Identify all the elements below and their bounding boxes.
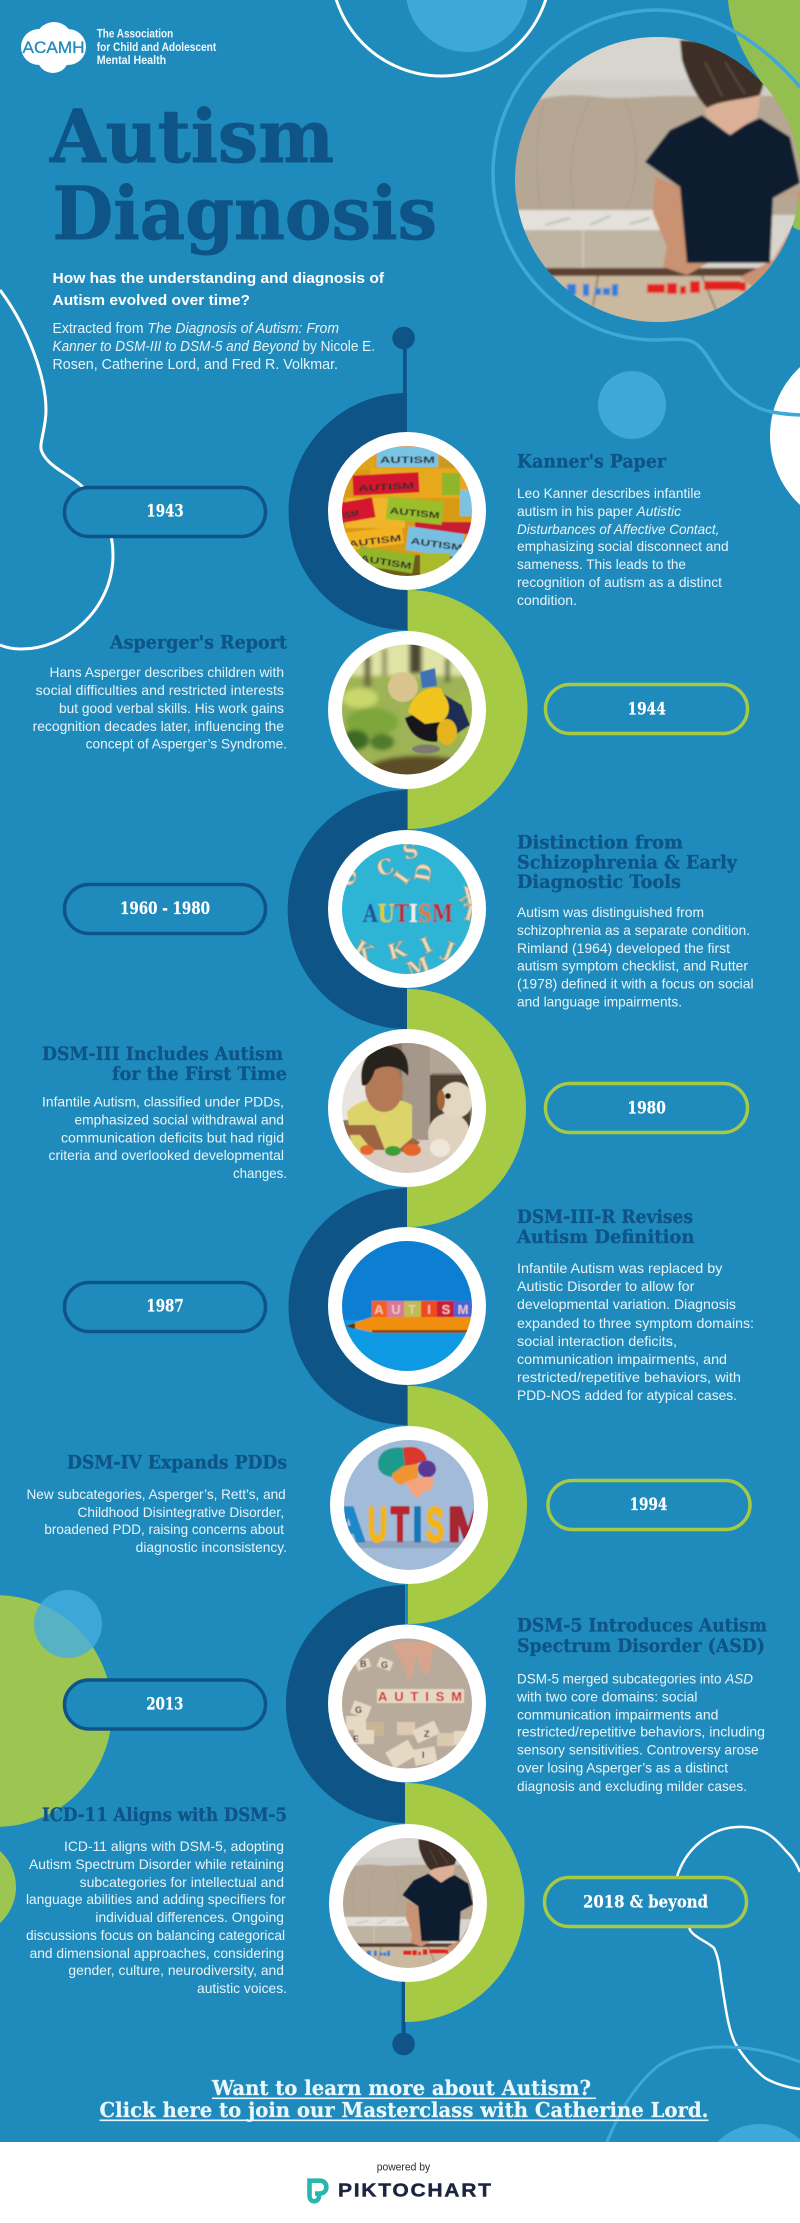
photo: scrabble tiles spelling AUTISM: G <box>355 1705 362 1715</box>
text block: Kanner's Paper: recognition of autism as a distinct <box>517 575 722 590</box>
photo: colourful AUTISM letters on blue: C <box>373 852 397 882</box>
photo: AUTISM blocks on a pencil: I <box>427 1302 431 1317</box>
date pill: 1944: 1944 <box>628 700 666 720</box>
text block: DSM-III Includes Autism: Infantile Autism, classified under PDDs, <box>42 1095 284 1110</box>
decorative shape: left green circle <box>0 1595 112 1827</box>
text block: DSM-IV Expands PDDs: New subcategories, Asperger’s, Rett’s, and <box>26 1487 286 1502</box>
photo: colourful AUTISM letters on blue: K <box>385 936 410 965</box>
text block: DSM-5 Introduces ASD: over losing Asperger’s as a distinct <box>517 1761 728 1776</box>
text block: Kanner's Paper: autism in his paper Autistic <box>517 504 681 519</box>
decorative shape: top light blue circle <box>406 0 528 52</box>
text block: DSM-IV Expands PDDs: broadened PDD, raising concerns about <box>44 1522 284 1537</box>
text block: DSM-5 Introduces ASD: DSM-5 Introduces Autism <box>517 1616 767 1637</box>
photo: scrabble tiles spelling AUTISM: Z <box>424 1729 430 1739</box>
text block: DSM-III-R Revises Autism Definition: PDD-NOS added for atypical cases. <box>517 1388 737 1403</box>
photo: autism paper labels: AUTISM <box>348 533 402 549</box>
title: Diagnosis <box>52 171 437 257</box>
date pill: 1980 <box>546 1084 748 1132</box>
source citation: Kanner to DSM-III to DSM-5 and Beyond by Nicole E. <box>52 339 375 355</box>
text block: DSM-III-R Revises Autism Definition: social interaction deficits, <box>517 1334 677 1349</box>
photo: scrabble tiles spelling AUTISM: G <box>381 1660 388 1670</box>
text block: DSM-5 Introduces ASD <box>516 1616 767 1794</box>
date pill: 1994 <box>548 1480 750 1530</box>
date pill: 1943 <box>64 488 266 536</box>
text block: Distinction from Schizophrenia: and language impairments. <box>517 994 682 1009</box>
text block: ICD-11 Aligns with DSM-5: ICD-11 aligns with DSM-5, adopting <box>64 1839 284 1854</box>
photo: clay brain and AUTISM letters: U <box>368 1499 387 1552</box>
decorative shape: small light blue circle <box>598 371 666 439</box>
photo: colourful AUTISM letters on blue: O <box>333 864 363 890</box>
Piktochart wordmark: PIKTOCHART <box>338 2180 493 2201</box>
text block: Asperger's Report: but good verbal skills. His work gains <box>59 701 284 716</box>
photo: AUTISM blocks on a pencil: U <box>391 1302 401 1317</box>
photo: scrabble tiles spelling AUTISM: AUTISM <box>378 1689 462 1704</box>
text block: DSM-III-R Revises Autism Definition: communication impairments, and <box>517 1352 727 1367</box>
decorative shape: translucent light blue circle <box>34 1590 102 1658</box>
date pill: 2018 and beyond: 2018 & beyond <box>583 1893 708 1913</box>
text block: DSM-III-R Revises Autism Definition: expanded to three symptom domains: <box>517 1316 754 1331</box>
text block: Asperger's Report: social difficulties and restricted interests <box>36 683 284 698</box>
date pill: 1960 - 1980: 1960 - 1980 <box>120 899 210 919</box>
text block: Distinction from Schizophrenia: autism symptom checklist, and Rutter <box>517 958 748 973</box>
photo: autism paper labels: AUTISM <box>359 553 412 571</box>
photo: colourful AUTISM letters on blue: K <box>350 935 378 966</box>
photo: clay brain and AUTISM letters: T <box>391 1499 409 1552</box>
logo: ACAMH <box>21 22 216 73</box>
decorative shape: right white blob <box>770 342 800 530</box>
timeline spine <box>392 327 415 2055</box>
photo: clay brain and AUTISM letters: M <box>448 1499 488 1552</box>
photo: scrabble tiles spelling AUTISM: E <box>353 1734 359 1744</box>
date pill: 1943: 1943 <box>146 502 184 522</box>
logo wordmark: ACAMH <box>22 38 84 57</box>
text block: ICD-11 Aligns with DSM-5: and dimensional approaches, considering <box>30 1946 284 1961</box>
text block: ICD-11 Aligns with DSM-5: discussions focus on balancing categorical <box>26 1928 285 1943</box>
decorative line: bottom right white outline <box>676 1827 800 2089</box>
date pill: 1960 - 1980 <box>64 884 266 934</box>
text block: DSM-III Includes Autism: for the First Time <box>112 1064 287 1085</box>
photo: AUTISM blocks on a pencil <box>340 1240 475 1375</box>
photo: autism paper labels: AUTISM <box>389 505 440 521</box>
text block: DSM-III-R Revises Autism Definition: Infantile Autism was replaced by <box>517 1261 723 1276</box>
date pill: 1980: 1980 <box>628 1098 666 1118</box>
text block: ICD-11 Aligns with DSM-5: gender, culture, neurodiversity, and <box>68 1963 284 1978</box>
text block: DSM-IV Expands PDDs: diagnostic inconsistency. <box>136 1540 287 1555</box>
photo: clay brain and AUTISM letters: I <box>413 1499 422 1552</box>
decorative line: bottom right light blue arc <box>607 2047 800 2142</box>
text block: DSM-IV Expands PDDs: DSM-IV Expands PDDs <box>67 1453 287 1474</box>
photo: colourful AUTISM letters on blue: S <box>400 837 421 865</box>
text block: ICD-11 Aligns with DSM-5: autistic voices. <box>197 1981 287 1996</box>
title <box>49 94 437 257</box>
photo: colourful AUTISM letters on blue: X <box>456 881 481 911</box>
white photo rings <box>328 432 488 1982</box>
photo: colourful AUTISM letters on blue <box>342 844 472 974</box>
title: Autism <box>49 94 334 180</box>
call to action <box>100 2076 708 2122</box>
subtitle question: How has the understanding and diagnosis of <box>52 271 384 287</box>
photo: autism paper labels <box>339 445 475 580</box>
text block: DSM-III-R Revises Autism Definition: restricted/repetitive behaviors, with <box>517 1370 741 1385</box>
photo: AUTISM blocks on a pencil: T <box>408 1302 416 1317</box>
decorative line: light blue ring around the photo <box>493 10 800 415</box>
text block: DSM-III-R Revises Autism Definition: Autism Definition <box>516 1227 695 1248</box>
text block: DSM-III Includes Autism: communication deficits but had rigid <box>61 1131 284 1146</box>
date pill: 2013 <box>64 1680 266 1729</box>
subtitle question <box>52 271 384 309</box>
powered by: powered by <box>377 2162 431 2174</box>
photo: boy lining up blocks (small) <box>341 1835 478 1972</box>
text block: DSM-III-R Revises Autism Definition: DSM-III-R Revises <box>517 1207 693 1228</box>
date pill: 1987 <box>64 1282 266 1332</box>
timeline arcs <box>286 393 527 2022</box>
photo: colourful AUTISM letters on blue: M <box>403 951 434 983</box>
source citation <box>52 321 375 373</box>
text block: DSM-III Includes Autism: emphasized social withdrawal and <box>74 1113 284 1128</box>
text block: Distinction from Schizophrenia <box>517 833 754 1009</box>
text block: Distinction from Schizophrenia: Rimland (1964) developed the first <box>517 941 730 956</box>
text block: Kanner's Paper: emphasizing social disconnect and <box>517 539 729 554</box>
text block: Kanner's Paper: Kanner's Paper <box>517 452 666 472</box>
icon: ACAMH cloud <box>21 22 86 73</box>
text block: Kanner's Paper: sameness. This leads to the <box>517 557 686 572</box>
organisation name <box>97 27 216 67</box>
photo: clay brain and AUTISM letters <box>344 1440 474 1570</box>
photo: scrabble tiles spelling AUTISM: B <box>360 1659 367 1669</box>
text block: DSM-IV Expands PDDs <box>26 1453 287 1555</box>
photo: child playing with teddy bear <box>342 1043 472 1173</box>
text block: DSM-5 Introduces ASD: restricted/repetitive behaviors, including <box>517 1724 765 1740</box>
text block: DSM-5 Introduces ASD: communication impairments and <box>517 1708 718 1723</box>
photo: autism paper labels: AUTISM <box>410 536 463 553</box>
text block: DSM-5 Introduces ASD: with two core domains: social <box>516 1690 697 1704</box>
decorative shape: top white ring <box>331 0 551 76</box>
date pill: 1987: 1987 <box>146 1297 184 1317</box>
decorative shape: top green blob <box>728 0 800 230</box>
text block: Distinction from Schizophrenia: schizophrenia as a separate condition. <box>517 923 750 938</box>
decorative shape: small left green circle <box>0 1838 16 1936</box>
decorative line: left white outline <box>0 290 113 649</box>
text block: DSM-III-R Revises Autism Definition <box>516 1207 754 1403</box>
text block: DSM-IV Expands PDDs: Childhood Disintegrative Disorder, <box>78 1505 284 1520</box>
photo: AUTISM blocks on a pencil: A <box>374 1302 384 1317</box>
text block: DSM-III-R Revises Autism Definition: Autistic Disorder to allow for <box>517 1279 695 1294</box>
text block: Distinction from Schizophrenia: Diagnostic Tools <box>517 872 681 893</box>
text block: Distinction from Schizophrenia: (1978) defined it with a focus on social <box>517 976 754 991</box>
date pill: 1994: 1994 <box>630 1495 667 1515</box>
text block: Kanner's Paper: Leo Kanner describes infantile <box>517 486 701 501</box>
date pill: 2018 and beyond <box>544 1878 746 1926</box>
text block: Asperger's Report: recognition decades later, influencing the <box>33 719 284 734</box>
photo: clay brain and AUTISM letters: S <box>426 1499 444 1552</box>
photo: AUTISM blocks on a pencil: M <box>458 1302 468 1317</box>
text block: DSM-5 Introduces ASD: DSM-5 merged subcategories into ASD <box>517 1672 753 1686</box>
call to action: Click here to join our Masterclass with Catherine Lord. <box>100 2098 708 2122</box>
text block: DSM-III Includes Autism: criteria and overlooked developmental <box>48 1148 284 1163</box>
text block: DSM-5 Introduces ASD: diagnosis and excluding milder cases. <box>517 1779 747 1794</box>
text block: Distinction from Schizophrenia: Distinction from <box>517 833 683 854</box>
photo: colourful AUTISM letters on blue: I <box>417 932 436 959</box>
text block: Asperger's Report <box>33 633 287 752</box>
text block: ICD-11 Aligns with DSM-5: language abilities and adding specifiers for <box>26 1892 286 1907</box>
organisation name: The Association <box>97 27 173 41</box>
source citation: Rosen, Catherine Lord, and Fred R. Volkmar. <box>52 357 338 373</box>
text block: DSM-III Includes Autism: DSM-III Includes Autism <box>42 1044 283 1065</box>
text block: Asperger's Report: concept of Asperger’s Syndrome. <box>86 736 287 752</box>
photo: scrabble tiles spelling AUTISM <box>342 1638 472 1768</box>
organisation name: for Child and Adolescent <box>97 40 216 54</box>
text block: DSM-III Includes Autism <box>42 1044 287 1181</box>
text block: Kanner's Paper: condition. <box>517 593 577 608</box>
photo: autism paper labels: AUTISM <box>358 480 414 493</box>
photo: colourful AUTISM letters on blue: T <box>459 899 481 927</box>
text block: Asperger's Report: Asperger's Report <box>109 633 287 654</box>
text block: ICD-11 Aligns with DSM-5: subcategories for intellectual and <box>80 1875 284 1890</box>
subtitle question: Autism evolved over time? <box>52 293 250 309</box>
text block: DSM-III-R Revises Autism Definition: developmental variation. Diagnosis <box>517 1297 736 1312</box>
photo: colourful AUTISM letters on blue: J <box>438 936 458 963</box>
photo: autism paper labels: ISM <box>342 508 359 521</box>
photo: child in yellow jacket in a forest <box>342 644 472 774</box>
text block: ICD-11 Aligns with DSM-5: Autism Spectrum Disorder while retaining <box>29 1857 284 1872</box>
date pill: 1944 <box>546 684 748 734</box>
text block: Distinction from Schizophrenia: Schizophrenia & Early <box>517 853 738 874</box>
text block: ICD-11 Aligns with DSM-5 <box>26 1805 287 1996</box>
text block: DSM-III Includes Autism: changes. <box>233 1166 287 1181</box>
photo: colourful AUTISM letters on blue: I <box>389 866 415 889</box>
photo: autism paper labels: AUTISM <box>380 455 435 465</box>
icon: Piktochart logo <box>310 2181 326 2201</box>
source citation: Extracted from The Diagnosis of Autism: From <box>52 321 339 337</box>
text block: Distinction from Schizophrenia: Autism was distinguished from <box>517 905 704 920</box>
text block: DSM-5 Introduces ASD: sensory sensitivities. Controversy arose <box>517 1743 759 1758</box>
photo: AUTISM blocks on a pencil: S <box>442 1302 451 1317</box>
text block: ICD-11 Aligns with DSM-5: ICD-11 Aligns with DSM-5 <box>42 1805 287 1826</box>
text block: Asperger's Report: Hans Asperger describes children with <box>50 665 284 680</box>
photo: boy lining up blocks <box>510 30 800 330</box>
call to action: Want to learn more about Autism? <box>211 2076 591 2100</box>
text block: DSM-5 Introduces ASD: Spectrum Disorder (ASD) <box>517 1636 765 1657</box>
footer <box>0 2142 800 2223</box>
decorative shape: bottom right light blue circle <box>700 2124 800 2223</box>
date pill: 2013: 2013 <box>146 1695 183 1715</box>
photo: scrabble tiles spelling AUTISM: I <box>422 1750 425 1760</box>
text block: Kanner's Paper: Disturbances of Affective Contact, <box>517 522 719 537</box>
text block: Kanner's Paper <box>517 452 729 608</box>
photo: clay brain and AUTISM letters: A <box>332 1499 365 1552</box>
organisation name: Mental Health <box>97 53 166 67</box>
photo: colourful AUTISM letters on blue: AUTISM <box>362 899 453 928</box>
text block: ICD-11 Aligns with DSM-5: individual differences. Ongoing <box>95 1910 284 1925</box>
photo: colourful AUTISM letters on blue: D <box>409 862 437 884</box>
